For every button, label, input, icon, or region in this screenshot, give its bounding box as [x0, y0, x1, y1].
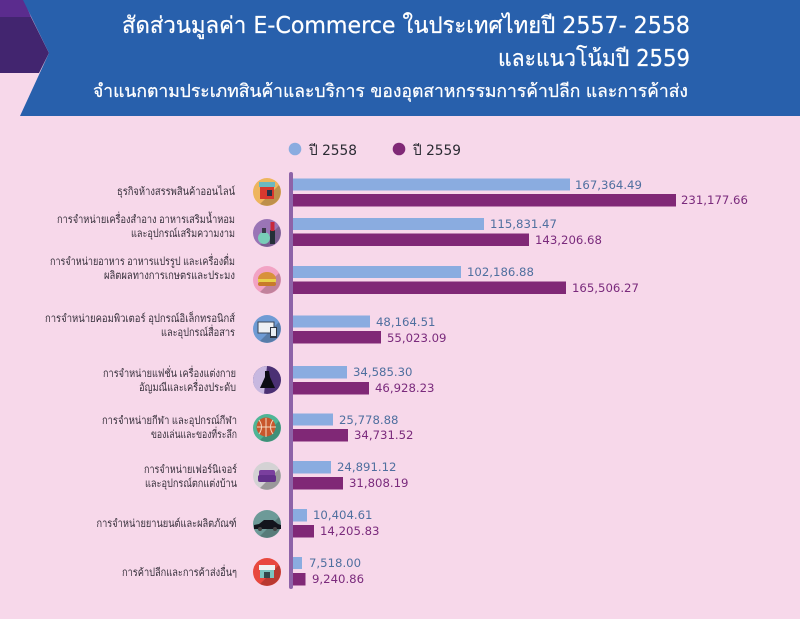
row 9: other retail	[122, 556, 364, 586]
row 8: automotive: 10,404.61	[313, 508, 372, 522]
row 4: computers: การจำหน่ายคอมพิวเตอร์ อุปกรณ์อิเล็กทรอนิกส์	[45, 311, 235, 325]
row 7: furniture: และอุปกรณ์ตกแต่งบ้าน	[145, 477, 237, 490]
subtitle: จำแนกตามประเภทสินค้าและบริการ ของอุตสาหกรรมการค้าปลีก และการค้าส่ง	[93, 81, 688, 102]
row 8: automotive: การจำหน่ายยานยนต์และผลิตภัณฑ์	[96, 517, 236, 530]
row 4: computers: 55,023.09	[387, 331, 446, 345]
row 2: cosmetics: และอุปกรณ์เสริมความงาม	[131, 227, 235, 240]
row 5: fashion: อัญมณีและเครื่องประดับ	[139, 379, 236, 394]
axis line	[289, 172, 293, 589]
row 5: fashion: 34,585.30	[353, 365, 412, 379]
row 5: fashion: 46,928.23	[375, 381, 434, 395]
row 7: furniture: การจำหน่ายเฟอร์นิเจอร์	[144, 463, 237, 476]
row 4: computers: และอุปกรณ์สื่อสาร	[161, 324, 235, 339]
row 1: department store: 167,364.49	[575, 178, 642, 192]
row 2: cosmetics	[57, 211, 602, 247]
row 5: fashion	[103, 365, 434, 395]
row 8: automotive	[96, 508, 379, 538]
row 1: department store	[117, 178, 748, 207]
row 3: food: ผลิตผลทางการเกษตรและประมง	[104, 270, 235, 282]
row 5: fashion: การจำหน่ายแฟชั่น เครื่องแต่งกาย	[103, 365, 236, 380]
legend	[289, 143, 461, 159]
row 3: food: 165,506.27	[572, 281, 639, 295]
title: สัดส่วนมูลค่า E-Commerce ในประเทศไทยปี 2557- 2558	[122, 12, 690, 39]
row 9: other retail: การค้าปลีกและการค้าส่งอื่นๆ	[122, 564, 237, 579]
row 2: cosmetics: 115,831.47	[490, 217, 557, 231]
row 3: food: การจำหน่ายอาหาร อาหารแปรรูป และเครื่องดื่ม	[50, 253, 235, 268]
row 2: cosmetics: การจำหน่ายเครื่องสำอาง อาหารเสริมน้ำหอม	[57, 211, 235, 226]
header ribbon accent	[0, 0, 49, 73]
row 7: furniture: 31,808.19	[349, 476, 408, 490]
row 9: other retail: 9,240.86	[312, 572, 364, 586]
row 6: sports: ของเล่นและของที่ระลึก	[151, 426, 237, 441]
row 4: computers: 48,164.51	[376, 315, 435, 329]
row 2: cosmetics: 143,206.68	[535, 233, 602, 247]
row 3: food	[50, 253, 639, 295]
row 3: food: 102,186.88	[467, 265, 534, 279]
row 6: sports: 34,731.52	[354, 428, 413, 442]
row 6: sports: 25,778.88	[339, 413, 398, 427]
row 1: department store: 231,177.66	[681, 193, 748, 207]
title: และแนวโน้มปี 2559	[498, 45, 690, 72]
title	[122, 12, 690, 72]
row 9: other retail: 7,518.00	[309, 556, 361, 570]
row 7: furniture: 24,891.12	[337, 460, 396, 474]
row 4: computers	[45, 311, 446, 345]
row 6: sports: การจำหน่ายกีฬา และอุปกรณ์กีฬา	[102, 414, 237, 427]
row 6: sports	[102, 413, 413, 442]
row 7: furniture	[144, 460, 408, 490]
row 8: automotive: 14,205.83	[320, 524, 379, 538]
legend: ปี 2558	[309, 143, 357, 159]
legend: ปี 2559	[413, 143, 461, 159]
header banner	[20, 0, 800, 116]
row 1: department store: ธุรกิจห้างสรรพสินค้าออนไลน์	[117, 185, 235, 198]
